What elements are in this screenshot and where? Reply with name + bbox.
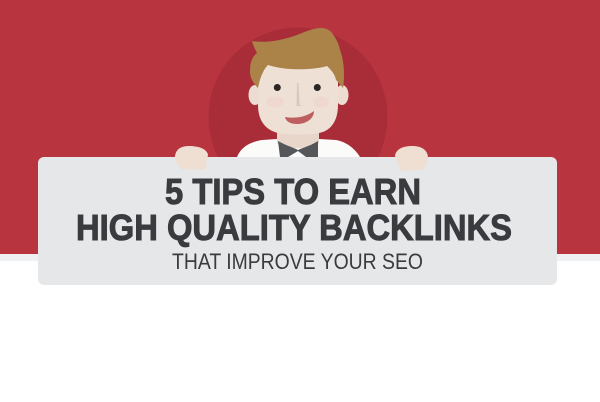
character: businessman bbox=[237, 28, 360, 157]
subtitle: THAT IMPROVE YOUR SEO bbox=[172, 249, 423, 274]
right hand bbox=[395, 146, 428, 171]
card background bbox=[38, 157, 557, 285]
cheeks bbox=[266, 96, 284, 108]
smile bbox=[285, 111, 314, 124]
pale stripe under band bbox=[0, 254, 600, 261]
face bbox=[258, 60, 338, 134]
left hand bbox=[175, 146, 208, 170]
bow tie bbox=[278, 141, 318, 157]
title line 2: HIGH QUALITY BACKLINKS bbox=[76, 207, 512, 248]
shirt bbox=[237, 139, 360, 157]
hair bbox=[250, 28, 344, 88]
neck bbox=[277, 125, 319, 148]
title line 1: 5 TIPS TO EARN bbox=[165, 171, 421, 212]
red background band bbox=[0, 0, 600, 254]
eyes bbox=[274, 84, 281, 91]
dark red circle behind character bbox=[208, 28, 388, 206]
nose bbox=[296, 83, 303, 106]
sign card bbox=[38, 157, 557, 285]
ears bbox=[248, 85, 262, 105]
